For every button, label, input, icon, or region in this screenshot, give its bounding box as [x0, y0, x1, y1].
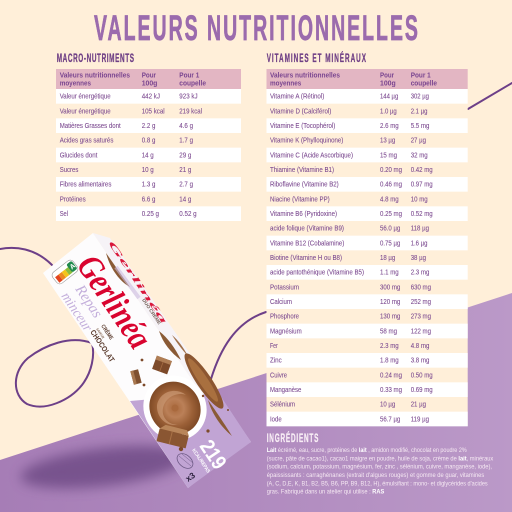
panel: macro-nutriments table: 219 kcal — [179, 106, 202, 115]
product shadow — [18, 438, 190, 496]
panel: vitamines et minéraux table: 130 mg — [380, 312, 400, 321]
panel: vitamines et minéraux table: Pour 1 — [411, 70, 431, 79]
panel: vitamines et minéraux table: 0.33 mg — [380, 385, 402, 394]
chocolate crumbs — [179, 395, 229, 451]
panel: vitamines et minéraux table: 119 µg — [411, 414, 429, 423]
panel: vitamines et minéraux table: coupelle — [411, 79, 437, 88]
panel: vitamines et minéraux table: Calcium — [270, 297, 292, 306]
panel: vitamines et minéraux table: 21 µg — [411, 400, 426, 409]
panel: vitamines et minéraux table: Vitamine E (Tocophérol) — [270, 121, 335, 130]
icon: bowl x3 — [174, 451, 197, 484]
panel: vitamines et minéraux table: Vitamine A (Rétinol) — [270, 92, 324, 101]
calorie badge: 219 — [195, 436, 231, 474]
panel: vitamines et minéraux table: Biotine (Vitamine H ou B8) — [270, 253, 342, 262]
panel: vitamines et minéraux table: 0.52 mg — [411, 209, 433, 218]
panel: vitamines et minéraux table: 630 mg — [411, 282, 431, 291]
panel: macro-nutriments table: Acides gras saturés — [60, 136, 114, 145]
panel: vitamines et minéraux table: 27 µg — [411, 136, 426, 145]
panel: macro-nutriments table: moyennes — [60, 79, 91, 88]
panel: vitamines et minéraux table: Sélénium — [270, 400, 295, 409]
panel: vitamines et minéraux table: 18 µg — [380, 253, 395, 262]
panel: macro-nutriments table: 2.7 g — [179, 180, 193, 189]
panel: macro-nutriments table: Pour 1 — [179, 70, 199, 79]
panel: vitamines et minéraux table: acide pantothénique (Vitamine B5) — [270, 268, 364, 277]
panel: vitamines et minéraux table: 56.7 µg — [380, 414, 400, 423]
panel: macro-nutriments table: coupelle — [179, 79, 206, 88]
heading: ingrédients: INGRÉDIENTS — [267, 431, 318, 444]
panel: vitamines et minéraux table: Manganèse — [270, 385, 301, 394]
panel: vitamines et minéraux table: 1.0 µg — [380, 106, 397, 115]
large chocolate piece — [157, 424, 190, 448]
panel: vitamines et minéraux table: 56.0 µg — [380, 224, 400, 233]
panel: vitamines et minéraux table: 0.20 mg — [380, 165, 402, 174]
panel: vitamines et minéraux table: 10 µg — [380, 400, 395, 409]
panel: vitamines et minéraux table: Zinc — [270, 356, 282, 365]
panel: vitamines et minéraux table: 1.8 mg — [380, 356, 399, 365]
panel: vitamines et minéraux table: Vitamine B6 (Pyridoxine) — [270, 209, 337, 218]
sub-brand script: minceur — [58, 290, 95, 335]
panel: vitamines et minéraux table: Iode — [270, 414, 282, 423]
panel: vitamines et minéraux table: 2.6 mg — [380, 121, 399, 130]
panel: vitamines et minéraux table: 144 µg — [380, 92, 398, 101]
panel: macro-nutriments table: 29 g — [179, 150, 191, 159]
panel: vitamines et minéraux table: Fer — [270, 341, 278, 350]
panel: macro-nutriments table: 14 g — [179, 194, 191, 203]
panel: vitamines et minéraux table: Magnésium — [270, 326, 302, 335]
panel: vitamines et minéraux table: 0.24 mg — [380, 370, 402, 379]
panel: vitamines et minéraux table: 2.1 µg — [411, 106, 427, 115]
panel: vitamines et minéraux table: 0.97 mg — [411, 180, 433, 189]
panel: vitamines et minéraux table: 0.42 mg — [411, 165, 433, 174]
panel: vitamines et minéraux table: moyennes — [270, 79, 301, 88]
panel: vitamines et minéraux table: Pour — [380, 70, 394, 79]
panel: vitamines et minéraux table: 273 mg — [411, 312, 431, 321]
product flavour text: CHOCOLAT — [88, 328, 117, 364]
icon: nutri-score — [50, 258, 80, 286]
panel: vitamines et minéraux table: 120 mg — [380, 297, 400, 306]
panel: vitamines et minéraux table: Vitamine K (Phylloquinone) — [270, 136, 343, 145]
side panel decoration: Gerlinéa — [106, 239, 169, 326]
panel: vitamines et minéraux table: 1.6 µg — [411, 238, 427, 247]
panel: vitamines et minéraux table: 100g — [380, 79, 396, 88]
panel: vitamines et minéraux table: 58 mg — [380, 326, 397, 335]
panel: vitamines et minéraux table: Vitamine D (Calciférol) — [270, 106, 331, 115]
title: VALEURS NUTRITIONNELLES — [94, 9, 418, 49]
purple diagonal floor — [0, 293, 512, 512]
panel: macro-nutriments table: 0.25 g — [142, 209, 159, 218]
panel: vitamines et minéraux table: Niacine (Vitamine PP) — [270, 194, 330, 203]
panel: macro-nutriments table: Valeur énergétique — [60, 92, 111, 101]
panel: vitamines et minéraux table: 38 µg — [411, 253, 426, 262]
panel: vitamines et minéraux table: 3.8 mg — [411, 356, 429, 365]
panel: macro-nutriments table: 100g — [142, 79, 157, 88]
panel: macro-nutriments table: Sel — [60, 209, 68, 218]
calorie badge: KCAL/REPAS — [190, 448, 211, 475]
panel: vitamines et minéraux table: 0.25 mg — [380, 209, 402, 218]
box faces — [43, 233, 251, 488]
chocolate pieces — [130, 356, 172, 386]
panel: macro-nutriments table: 105 kcal — [142, 106, 165, 115]
panel: vitamines et minéraux table: Potassium — [270, 282, 299, 291]
panel: vitamines et minéraux table: Valeurs nutritionnelles — [270, 70, 340, 79]
panel: macro-nutriments table: 0.52 g — [179, 209, 197, 218]
purple ribbon line — [0, 83, 512, 407]
panel: vitamines et minéraux table: 2.3 mg — [380, 341, 399, 350]
panel: macro-nutriments table — [56, 69, 241, 221]
panel: vitamines et minéraux table: 5.5 mg — [411, 121, 429, 130]
heading: vitamines et minéraux: VITAMINES ET MINÉRAUX — [267, 51, 366, 64]
text block: ingrédients: Lait écrémé, eau, sucre, protéines de lait , amidon modifié, chocolat en poudre 2% — [267, 447, 467, 454]
panel: vitamines et minéraux table: Riboflavine (Vitamine B2) — [270, 180, 339, 189]
panel: macro-nutriments table: 1.3 g — [142, 180, 155, 189]
panel: vitamines et minéraux table: 13 µg — [380, 136, 395, 145]
panel: macro-nutriments table: 21 g — [179, 165, 191, 174]
product box — [43, 233, 251, 488]
side pudding — [179, 349, 232, 436]
panel: vitamines et minéraux table: 302 µg — [411, 92, 429, 101]
panel: vitamines et minéraux table: 122 mg — [411, 326, 431, 335]
panel: vitamines et minéraux table: Cuivre — [270, 370, 287, 379]
panel: vitamines et minéraux table: acide folique (Vitamine B9) — [270, 224, 344, 233]
sub-brand script — [58, 281, 105, 335]
panel: vitamines et minéraux table: 10 mg — [411, 194, 428, 203]
panel: macro-nutriments table: Valeurs nutritionnelles — [60, 70, 130, 79]
panel: vitamines et minéraux table: Phosphore — [270, 312, 299, 321]
panel: vitamines et minéraux table: Vitamine B12 (Cobalamine) — [270, 238, 344, 247]
panel: macro-nutriments table: 1.7 g — [179, 136, 193, 145]
panel: vitamines et minéraux table: 1.1 mg — [380, 268, 399, 277]
panel: vitamines et minéraux table — [266, 69, 468, 426]
text block: ingrédients — [267, 447, 494, 496]
panel: vitamines et minéraux table: 32 mg — [411, 150, 428, 159]
panel: vitamines et minéraux table: Thiamine (Vitamine B1) — [270, 165, 334, 174]
icon: bowl x3: x3 — [184, 470, 197, 484]
text block: ingrédients: (sucre, pâte de cacao1), cacao1 maigre en poudre, huile de soja, crème de lait, minéraux — [267, 455, 494, 462]
panel: macro-nutriments table: Fibres alimentaires — [60, 180, 112, 189]
panel: macro-nutriments table: 4.6 g — [179, 121, 193, 130]
panel: vitamines et minéraux table: 2.3 mg — [411, 268, 429, 277]
panel: macro-nutriments table: Valeur énergétique — [60, 106, 111, 115]
panel: macro-nutriments table: 14 g — [142, 150, 154, 159]
text block: ingrédients: épaississants : carraghénanes (extrait d'algues rouges) et gomme de guar, vitamines — [267, 472, 485, 479]
panel: macro-nutriments table: 0.8 g — [142, 136, 155, 145]
panel: vitamines et minéraux table: 118 µg — [411, 224, 429, 233]
panel: vitamines et minéraux table: 0.50 mg — [411, 370, 433, 379]
panel: vitamines et minéraux table: 252 mg — [411, 297, 431, 306]
panel: vitamines et minéraux table: 0.69 mg — [411, 385, 433, 394]
panel: macro-nutriments table: Glucides dont — [60, 150, 97, 159]
panel: macro-nutriments table: 10 g — [142, 165, 154, 174]
panel: macro-nutriments table: Protéines — [60, 194, 86, 203]
text block: ingrédients: gras. Fabriqué dans un atelier qui utilise : RAS — [267, 489, 385, 496]
panel: vitamines et minéraux table: 0.75 µg — [380, 238, 400, 247]
side panel decoration — [106, 239, 188, 360]
brand logo: Gerlinéa — [69, 248, 160, 356]
panel: macro-nutriments table: Sucres — [60, 165, 79, 174]
panel: vitamines et minéraux table: 0.46 mg — [380, 180, 402, 189]
panel: vitamines et minéraux table: 4.8 mg — [380, 194, 399, 203]
heading: macro-nutriments: MACRO-NUTRIMENTS — [57, 52, 134, 64]
panel: macro-nutriments table: 923 kJ — [179, 92, 198, 101]
product flavour text: SAVEUR — [95, 327, 105, 340]
side panel decoration: DUO CRÈME — [141, 297, 164, 325]
panel: vitamines et minéraux table: 300 mg — [380, 282, 400, 291]
sub-brand script: Repas — [71, 281, 105, 321]
panel: vitamines et minéraux table: 15 mg — [380, 150, 397, 159]
panel: macro-nutriments table: Pour — [142, 70, 156, 79]
panel: macro-nutriments table: Matières Grasses dont — [60, 121, 121, 130]
panel: macro-nutriments table: 6.6 g — [142, 194, 155, 203]
panel: vitamines et minéraux table: Vitamine C (Acide Ascorbique) — [270, 150, 353, 159]
icon: nutri-score: A — [69, 263, 77, 271]
product flavour text: CRÈME — [99, 323, 116, 341]
pudding bowl — [131, 363, 219, 453]
panel: vitamines et minéraux table: 4.8 mg — [411, 341, 429, 350]
panel: macro-nutriments table: 442 kJ — [142, 92, 160, 101]
panel: macro-nutriments table: 2.2 g — [142, 121, 155, 130]
lower purple band — [130, 392, 251, 488]
